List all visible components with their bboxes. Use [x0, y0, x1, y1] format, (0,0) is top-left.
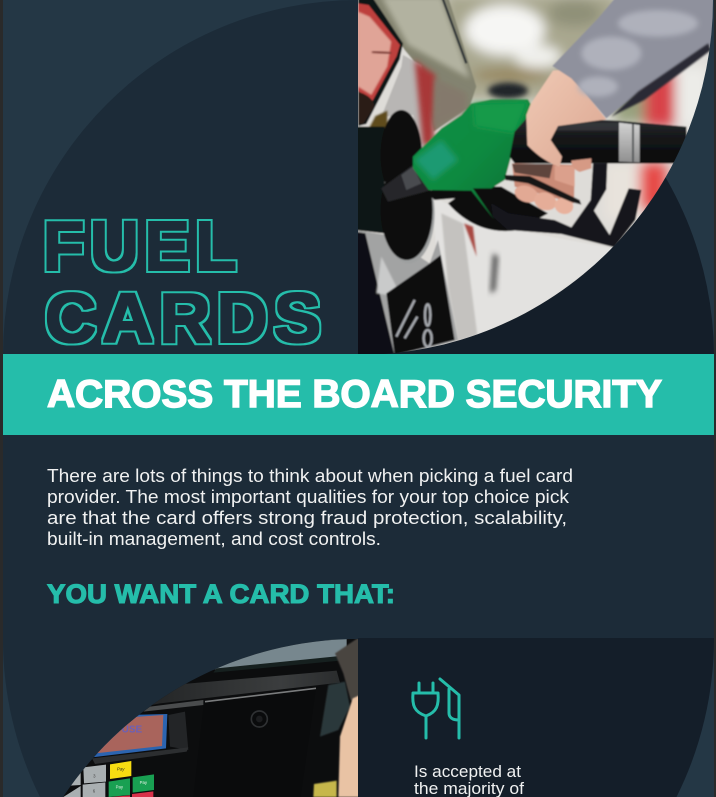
intro paragraph — [47, 466, 573, 549]
keypad: 6 — [93, 789, 96, 794]
keypad: Pay — [140, 780, 148, 785]
intro paragraph: There are lots of things to think about when picking a fuel card — [47, 466, 573, 486]
trigger guard — [491, 163, 641, 247]
panel: title quarter circle — [3, 0, 358, 355]
intro paragraph: are that the card offers strong fraud protection, scalability, — [47, 508, 567, 528]
panel: lower left quarter circle — [3, 639, 358, 797]
title: FUEL: FUEL — [43, 207, 242, 285]
key lock — [251, 711, 267, 727]
banner heading: ACROSS THE BOARD SECURITY — [47, 373, 662, 416]
person at right edge of photo — [334, 639, 358, 701]
metal collar — [619, 123, 640, 162]
icon: plug and knife — [413, 679, 459, 738]
keypad: 3 — [93, 773, 96, 778]
keypad: Pay — [117, 767, 125, 772]
photo: fuel pump keypad — [57, 637, 360, 797]
card text: Is accepted at — [414, 762, 521, 781]
black housing under the nozzle — [448, 187, 548, 231]
badge on the car door — [396, 300, 432, 347]
car body reflections — [381, 55, 435, 148]
spout — [381, 165, 431, 202]
tail light — [358, 0, 403, 126]
lower white car panel — [452, 210, 502, 296]
hand — [526, 70, 606, 167]
section heading: YOU WANT A CARD THAT: — [47, 579, 395, 609]
lower content background — [3, 435, 714, 639]
banner — [3, 354, 714, 435]
card text — [414, 762, 524, 797]
blurred forecourt background — [445, 0, 708, 220]
panel: lower right dark quarter circle — [358, 638, 714, 797]
intro paragraph: provider. The most important qualities for your top choice pick — [47, 487, 570, 507]
screen — [92, 714, 167, 757]
panel: dark quarter circle behind top photo — [358, 0, 714, 355]
photo: fuel pump keypad: USE — [122, 725, 143, 736]
screen housing — [168, 712, 188, 750]
pump nozzle — [413, 99, 531, 219]
keypad — [63, 761, 154, 797]
grip — [510, 117, 688, 163]
fuel door opening — [380, 109, 423, 183]
keypad: Pay — [116, 785, 124, 790]
trigger lever — [505, 175, 581, 205]
intro paragraph: built-in management, and cost controls. — [47, 529, 381, 549]
photo: hand fuelling a car — [355, 0, 716, 358]
sleeve — [552, 0, 715, 118]
title: CARDS: CARDS — [45, 278, 327, 357]
window glass — [372, 0, 476, 132]
fingers under the grip — [512, 163, 575, 216]
door panel — [193, 688, 316, 797]
dark car door — [355, 127, 385, 233]
